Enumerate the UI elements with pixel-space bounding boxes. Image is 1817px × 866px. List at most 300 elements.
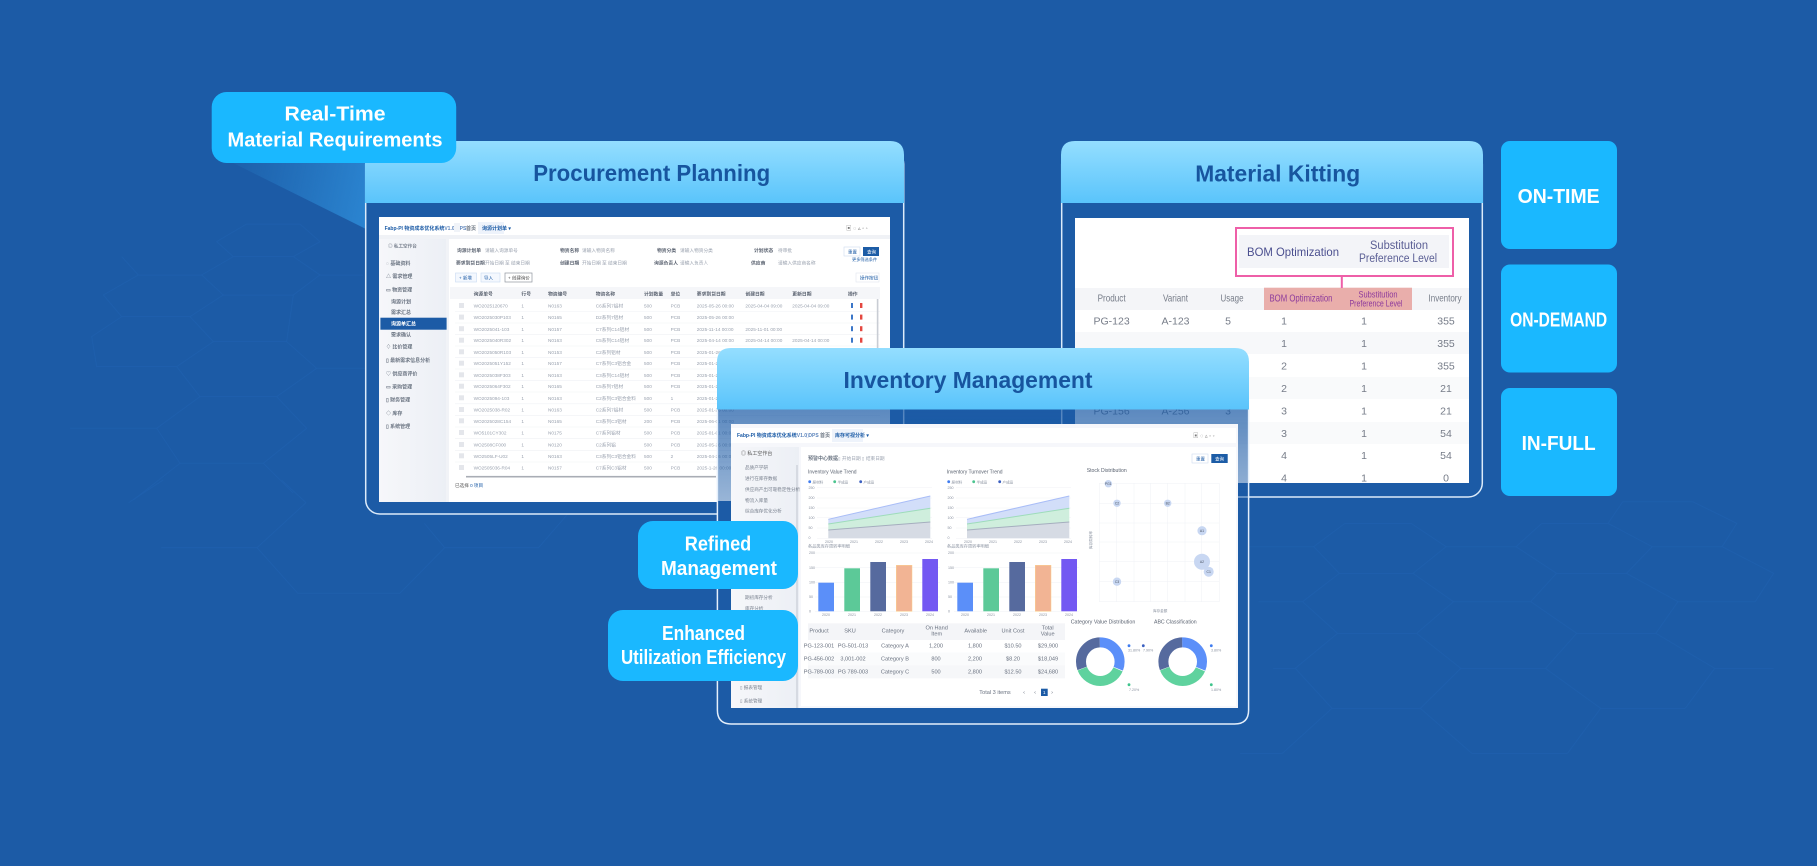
screenshot text: navigation and table rows: 2025-01-26 00:00 [697,350,734,355]
table header row: Product [1098,292,1126,304]
screenshot text: navigation and table rows: PCB [671,304,680,308]
screenshot text: navigation and table rows: C7系列铝材 [596,430,621,437]
screenshot: procurement table app [379,217,890,502]
screenshot text: navigation and table rows: WO2508CF000 [474,443,507,448]
screenshot text: navigation and table rows: N0157 [548,361,562,366]
screenshot text: navigation and table rows: C7系列C3铝材 [596,465,627,472]
table: material kitting [1075,218,1469,484]
screenshot text: navigation and table rows: N0163 [548,396,562,401]
screenshot text: navigation and table rows: 2025-04-26 00:00 [697,454,734,459]
screenshot text: navigation and table rows: N0165 [548,315,562,320]
screenshot text: navigation and table rows: 1 [521,361,524,366]
donut chart: category value distribution: 7.20% [1129,688,1140,692]
screenshot text: navigation and table rows: PCB [671,350,680,355]
table: inventory items: 2,200 [968,657,982,663]
dashboard top bar and sidebar text: 供应商产出可靠稳定性分析 [745,486,801,493]
screenshot text: navigation and table rows: WO2025038F303 [474,373,511,378]
area chart: inventory turnover trend: 2021 [989,540,997,544]
screenshot text: navigation and table rows: PCB [671,384,680,389]
area chart: inventory turnover trend: 250 [948,486,954,490]
table: inventory items: PG 789-003 [838,670,868,676]
table: inventory items: Available [964,628,987,634]
screenshot text: navigation and table rows: ▭ 采购管理 [386,384,412,390]
screenshot text: navigation and table rows: PCB [671,327,680,332]
scatter chart: stock distribution: 库存周转率 [1088,531,1093,549]
area chart: inventory value trend: 产成品 [864,479,875,484]
screenshot text: navigation and table rows: 1 [521,431,524,436]
table: inventory items: PG-123-001 [804,644,834,650]
screenshot text: navigation and table rows: 500 [644,327,652,332]
donut chart: category value distribution [1071,620,1154,692]
dashboard top bar and sidebar text: 预警中心数据 [808,455,838,462]
screenshot text: navigation and table rows: + 创建询价 [508,274,530,282]
screenshot text: navigation and table rows: WO5101CY302 [474,431,507,436]
screenshot text: navigation and table rows: N0175 [548,431,562,436]
screenshot text: navigation and table rows: 询源计划 [391,298,411,306]
table rows: 5 [1225,316,1231,328]
screenshot text: navigation and table rows: 2025-01-26 00:00 [697,396,734,401]
table rows: A-256 [1161,406,1190,418]
table rows: 3 [1225,406,1231,418]
bar chart: left: 2022 [874,613,882,617]
table rows: PG-156 [1094,406,1130,418]
area chart: inventory turnover trend: Inventory Turnover Trend [947,470,1003,476]
screenshot text: navigation and table rows: ◌ 基础资料 [386,260,410,267]
screenshot text: navigation and table rows: 500 [644,338,652,343]
screenshot text: navigation and table rows: PCB [671,338,680,343]
screenshot text: navigation and table rows: ♡ 供应商评价 [386,370,417,378]
screenshot text: navigation and table rows: PCB [671,466,680,471]
screenshot text: navigation and table rows: 请输入询源单号 [485,247,518,254]
area chart: inventory turnover trend: 2024 [1064,540,1072,544]
bar chart: left: 0 [809,610,811,614]
area chart: inventory value trend: 150 [808,506,814,510]
donut chart: category value distribution: 7.90% [1143,648,1154,652]
table: inventory items: Item [931,632,942,638]
table rows: 1 [1361,406,1367,418]
screenshot text: navigation and table rows: 2025-06-01 00:00 [697,419,734,424]
area chart: inventory turnover trend: 原材料 [952,479,963,484]
callout: real-time material requirements [212,92,456,163]
screenshot text: navigation and table rows: 要求到货日期 [456,260,485,266]
screenshot text: navigation and table rows: ▣ ◌ ▵ ◦ ◦ [846,225,868,232]
screenshot text: navigation and table rows: 2025-04-04 09:00 [745,304,783,308]
screenshot text: navigation and table rows: 2025-01-01 00:00 [697,431,734,436]
highlighted column headers [1264,288,1412,310]
bar chart: left: 2020 [822,613,830,617]
screenshot text: navigation and table rows: 1 [521,315,524,320]
screenshot text: navigation and table rows: ▯ 财务管理 [386,396,410,404]
screenshot text: navigation and table rows: 询源负责人 [654,260,678,266]
table rows: 1 [1281,316,1287,328]
area chart: inventory turnover trend: 2023 [1039,540,1047,544]
screenshot text: navigation and table rows: WO2025094-103 [474,396,510,401]
screenshot text: navigation and table rows: 操作按钮 [860,274,878,282]
beam from real-time callout to procurement panel [233,163,370,231]
badge: on-demand: ON-DEMAND [1510,310,1607,332]
bar chart: right: 2023 [1039,613,1047,617]
screenshot text: navigation and table rows: 1 [671,396,674,401]
screenshot text: navigation and table rows: 1 [521,373,524,378]
screenshot text: navigation and table rows: 开始日期 至 结束日期 [485,260,530,266]
screenshot text: navigation and table rows: 重置 [848,248,857,256]
dashboard top bar and sidebar text: 进行在库存数据 [745,475,778,482]
screenshot text: navigation and table rows: 500 [644,373,652,378]
table: inventory items: 2,800 [968,670,982,676]
dashboard top bar and sidebar text: 库存分析 [745,605,764,612]
screenshot text: navigation and table rows: C5系列7铝材 [596,383,623,390]
table: inventory items: PG-501-013 [838,644,868,650]
bar chart: right: 100 [948,580,954,584]
screenshot text: navigation and table rows: WO2025051Y152 [474,361,511,366]
table: inventory items [804,623,1065,696]
bar chart: left [808,542,940,617]
background pattern: hexagon network [70,224,1774,753]
badge: in-full: IN-FULL [1522,433,1596,455]
donut chart: ABC classification: ABC Classification [1154,620,1197,626]
table: inventory items: Product [809,628,829,634]
bar chart: left: 2021 [848,613,856,617]
screenshot text: navigation and table rows: 1 [521,408,524,413]
dashboard top bar and sidebar text: 品质产学研 [745,464,768,471]
table: inventory items: 3,001-002 [840,657,866,663]
screenshot text: navigation and table rows: N0120 [548,443,562,448]
screenshot text: navigation and table rows: 1 [521,304,524,308]
area chart: inventory value trend: 半成品 [838,479,849,484]
table rows: 355 [1437,360,1455,372]
screenshot text: navigation and table rows: C7系列C14铝材 [596,326,629,333]
screenshot text: navigation and table rows: 请输入负责人 [680,260,708,266]
table header row: BOM Optimization [1270,292,1333,304]
callout: refined management: Refined [685,534,751,556]
screenshot text: navigation and table rows: Fabp-PI 物资成本优化系统V1.0 DPS [385,225,467,232]
donut chart: category value distribution: 31.80% [1128,648,1141,652]
table: inventory items: $12.50 [1004,670,1022,676]
screenshot text: navigation and table rows: N0163 [548,373,562,378]
screenshot text: navigation and table rows: WO2025038-R02 [474,408,510,413]
dashboard top bar and sidebar text: 物流入库量 [745,497,768,504]
bar chart: right: 2021 [987,613,995,617]
screenshot text: navigation and table rows: C3系列C3铝合金料 [596,453,636,460]
area chart: inventory value trend: Inventory Value Trend [808,470,857,476]
table: inventory items: Total [1042,626,1054,632]
screenshot text: navigation and table rows: C5系列C14铝材 [596,337,629,344]
table: inventory items: Category [882,628,905,634]
table rows: 355 [1437,316,1455,328]
screenshot text: navigation and table rows: D2系列7铝材 [596,314,623,321]
dashboard top bar and sidebar text: ▣ ◌ ▵ ◦ ◦ [1193,432,1215,440]
bar chart: left: 150 [809,566,815,570]
dashboard top bar and sidebar text: 期初库存分析 [745,594,773,601]
dashboard top bar and sidebar text: 综合库存优化分析 [745,508,782,514]
screenshot text: navigation and table rows: PCB [671,373,680,378]
screenshot text: navigation and table rows: 询源单汇总 [391,320,416,328]
screenshot text: navigation and table rows: C3系列C14铝材 [596,372,629,379]
table rows: 1 [1361,316,1367,328]
panel: inventory management [717,348,1249,724]
screenshot text: navigation and table rows: 已选择 0 项目 [455,482,483,489]
bar chart: left: 2023 [900,613,908,617]
screenshot text: navigation and table rows: 询源单号 [474,290,493,297]
screenshot text: navigation and table rows: 1 [521,466,524,471]
scatter chart: stock distribution: A1 [1200,529,1204,533]
screenshot text: navigation and table rows: 500 [644,315,652,320]
scatter chart: stock distribution: C3 [1115,580,1119,584]
table rows [1094,316,1455,484]
screenshot text: navigation and table rows: 1 [521,396,524,401]
screenshot text: navigation and table rows: 物资名称 [560,247,579,254]
screenshot text: navigation and table rows: 操作 [848,290,858,297]
screenshot text: navigation and table rows: 物资名称 [596,290,615,297]
callout: real-time material requirements: Material Requirements [228,130,442,152]
screenshot text: navigation and table rows: 2025-04-14 00:00 [697,338,734,343]
bar chart: right: 2020 [961,613,969,617]
table header row [1098,290,1462,308]
heading: inventory management: Inventory Management [844,367,1093,393]
screenshot text: navigation and table rows: 200 [644,419,652,424]
table: inventory items: ‹ [1023,690,1025,696]
table: inventory items: ‹ [1034,690,1036,696]
table: inventory items: PG-456-002 [804,657,834,663]
highlight box: BOM optimization and substitution preference: BOM Optimization [1247,245,1339,259]
scatter chart: stock distribution: 库存金额 [1153,608,1168,613]
callout: refined management [638,521,798,589]
table: inventory items: $24,680 [1038,670,1058,676]
screenshot text: navigation and table rows: C2系列7铝材 [596,407,623,414]
area chart: inventory value trend: 2023 [900,540,908,544]
screenshot text: navigation and table rows: C2系列C3铝合金料 [596,395,636,402]
table rows: PG-123 [1094,316,1130,328]
screenshot text: navigation and table rows: 1 [521,338,524,343]
area chart: inventory value trend: 250 [808,486,814,490]
screenshot text: navigation and table rows: ◎ 私工空作台 [388,242,417,250]
screenshot text: navigation and table rows: 创建日期 [745,290,765,297]
table rows: 355 [1437,338,1455,350]
screenshot text: navigation and table rows: 行号 [521,290,531,297]
screenshot text: navigation and table rows: WO2025064F302 [474,384,511,389]
table: inventory items: Value [1041,632,1055,638]
screenshot text: navigation and table rows: N0153 [548,350,562,355]
highlight box: BOM optimization and substitution preference: Substitution [1370,240,1428,252]
panel header: procurement planning [365,141,904,203]
screenshot text: navigation and table rows: 500 [644,443,652,448]
callout: real-time material requirements: Real-Time [284,104,386,126]
screenshot text: navigation and table rows: 500 [644,304,652,308]
screenshot text: navigation and table rows: C2系列铝材 [596,349,621,356]
panel header: material kitting [1061,141,1483,203]
screenshot text: navigation and table rows: ▭ 物资管理 [386,286,412,294]
screenshot text: navigation and table rows: C6系列7铝材 [596,302,623,310]
screenshot text: navigation and table rows: 1 [521,419,524,424]
screenshot text: navigation and table rows: WO2025041-103 [474,327,510,332]
table: inventory items: $10.50 [1004,644,1022,650]
screenshot text: navigation and table rows: 计划数量 [644,290,663,297]
dashboard top bar and sidebar text [737,429,1228,704]
screenshot text: navigation and table rows: PCB [671,443,680,448]
screenshot text: navigation and table rows: 2 [671,454,674,459]
table: inventory items: Category B [881,657,909,663]
screenshot text: navigation and table rows: N0163 [548,408,562,413]
screenshot text: navigation and table rows: 计划状态 [754,247,773,254]
table rows: 4 [1281,472,1287,484]
badge: on-time [1501,141,1617,249]
table rows: 54 [1440,450,1452,462]
dashboard top bar and sidebar text: ▯ 报表管理 [740,684,763,691]
table: inventory items: Category C [881,670,909,676]
table header row: Usage [1220,292,1244,304]
callout: enhanced utilization efficiency: Utilization Efficiency [621,647,787,669]
screenshot text: navigation and table rows: WO2025040R302 [474,338,512,343]
screenshot text: navigation and table rows: ◇ 库存 [386,410,402,417]
screenshot text: navigation and table rows: 请输入物资名称 [582,247,615,254]
area chart: inventory value trend: 100 [808,516,814,520]
area chart: inventory value trend: 2022 [875,540,883,544]
screenshot text: navigation and table rows: WO2505036-R04 [474,466,510,471]
screenshot text: navigation and table rows: 2025-04-14 00:00 [792,338,830,343]
table: inventory items: 800 [931,657,941,663]
screenshot text: navigation and table rows: 物资编号 [548,290,567,297]
table rows: 3 [1281,406,1287,418]
screenshot text: navigation and table rows: 500 [644,350,652,355]
table header row: Variant [1163,292,1188,304]
screenshot text: navigation and table rows: 更新日期 [792,290,812,297]
dashboard top bar and sidebar text: 重置 [1196,456,1205,462]
area chart: inventory value trend: 2021 [850,540,858,544]
screenshot text: navigation and table rows: 需求确认 [391,332,411,338]
screenshot text: navigation and table rows: 500 [644,408,652,413]
table rows: 1 [1361,428,1367,440]
screenshot text: navigation and table rows: WO2025030P103 [474,315,511,320]
screenshot text: navigation and table rows: PCB [671,361,680,366]
area chart: inventory value trend: 50 [808,526,812,530]
table rows: 21 [1440,406,1452,418]
table rows: 54 [1440,428,1452,440]
heading: procurement planning: Procurement Planning [533,160,770,186]
table: inventory items: $8.20 [1006,657,1020,663]
table rows: 4 [1281,450,1287,462]
callout: enhanced utilization efficiency: Enhanced [662,623,745,645]
area chart: inventory value trend: 2024 [925,540,933,544]
table: inventory items: Category A [881,644,909,650]
screenshot text: navigation and table rows: 需求汇总 [391,309,411,316]
screenshot text: navigation and table rows: 更多筛选条件 [852,256,877,263]
badge: on-time: ON-TIME [1518,186,1600,208]
panel header: inventory management [717,348,1249,410]
screenshot text: navigation and table rows: 供应商 [751,260,766,266]
bar chart: right: 2024 [1065,613,1073,617]
dashboard top bar and sidebar text: 首页 [820,432,830,439]
screenshot text: navigation and table rows: 500 [644,431,652,436]
screenshot text: navigation and table rows: WO2025120670 [474,304,508,308]
table: inventory items: 500 [931,670,941,676]
screenshot text: navigation and table rows: 创建日期 [560,260,579,266]
screenshot text: navigation and table rows: PCB [671,431,680,436]
table rows: 1 [1361,383,1367,395]
panel: material kitting [1061,141,1483,497]
screenshot: inventory dashboard [731,424,1238,708]
screenshot text: navigation and table rows: 2025-01-26 00:00 [697,408,734,413]
screenshot text: navigation and table rows: 2025-04-14 00:00 [745,338,783,343]
screenshot text: navigation and table rows: 1 [521,384,524,389]
screenshot text: navigation and table rows: 请输入供应商名称 [778,260,816,266]
area chart: inventory turnover trend: 半成品 [976,479,988,484]
dashboard top bar and sidebar text: ◎ 私工空作台 [741,450,772,457]
screenshot text: navigation and table rows: 2025-01-26 00:00 [697,384,734,389]
bar chart: right: 各品类库存周转率明细 [947,542,989,550]
screenshot text: navigation and table rows: 查询 [867,248,876,256]
screenshot text: navigation and table rows: 500 [644,466,652,471]
screenshot text: navigation and table rows: WO2025050R103 [474,350,512,355]
bar chart: left: 2024 [926,613,934,617]
bar chart: left: 各品类库存周转率明细 [808,542,850,550]
table rows: 1 [1281,338,1287,350]
table rows: A-123 [1161,316,1190,328]
screenshot text: navigation and table rows: N0163 [548,454,562,459]
screenshot text: navigation and table rows: ▯ 系统管理 [386,423,410,430]
screenshot text: navigation and table rows: 请输入物资分类 [680,247,713,254]
area chart: inventory turnover trend: 50 [948,526,952,530]
table: inventory items: PG-789-003 [804,670,834,676]
donut chart: category value distribution: Category Value Distribution [1071,620,1135,626]
area chart: inventory turnover trend: 200 [948,496,954,500]
pagination current page [1041,689,1048,696]
callout line: link from highlight to columns [1341,276,1343,288]
area chart: inventory turnover trend: 产成品 [1002,479,1014,484]
table: inventory items: 1,800 [968,644,982,650]
screenshot text: navigation and table rows: 500 [644,384,652,389]
bar chart: left: 50 [809,595,813,599]
table: inventory items: SKU [844,628,856,634]
bar chart: left: 100 [809,580,815,584]
screenshot text: navigation and table rows [385,222,879,489]
screenshot text: navigation and table rows: 单位 [671,290,680,297]
scatter chart: stock distribution: A2 [1200,560,1204,564]
scatter chart: stock distribution: Stock Distribution [1087,468,1127,474]
screenshot text: navigation and table rows: 2025-11-14 00:00 [697,327,734,332]
screenshot text: navigation and table rows: 导入 [484,276,493,280]
screenshot text: navigation and table rows: N0165 [548,419,562,424]
table rows: 1 [1361,450,1367,462]
scatter chart: stock distribution: C2 [1115,502,1119,506]
table: inventory items: Unit Cost [1001,628,1025,634]
dashboard top bar and sidebar text: ▯ 系统管理 [740,698,763,704]
screenshot text: navigation and table rows: 询源计划单 ▾ [482,225,511,232]
badge: on-demand [1501,264,1617,372]
panel: procurement planning [365,141,904,514]
table rows: 1 [1361,360,1367,372]
table header row: Substitution [1358,290,1398,300]
dashboard top bar and sidebar text: ▯ [806,433,809,439]
screenshot text: navigation and table rows: C2系列铝 [596,442,616,449]
screenshot text: navigation and table rows: + 新增 [459,274,472,282]
screenshot text: navigation and table rows: C3系列C3铝材 [596,418,627,425]
screenshot text: navigation and table rows: ▯ 最新需求信息分析 [386,357,430,364]
table header row: Inventory [1428,292,1462,304]
table rows: 1 [1361,472,1367,484]
screenshot text: navigation and table rows: 1 [521,350,524,355]
bar chart: right: 2022 [1013,613,1021,617]
donut chart: ABC classification: 1.80% [1211,688,1222,692]
area chart: inventory turnover trend: 0 [948,536,950,540]
screenshot text: navigation and table rows: WO2025028C154 [474,419,512,424]
bar chart: right: 200 [948,551,954,555]
scatter chart: stock distribution [1087,468,1219,613]
donut chart: ABC classification [1154,620,1222,692]
highlight box: BOM optimization and substitution preference [1236,228,1453,276]
screenshot text: navigation and table rows: 物资分类 [657,247,676,254]
screenshot text: navigation and table rows: 2025-1-26 00:00 [697,466,732,471]
screenshot text: navigation and table rows: PCB [671,419,680,424]
